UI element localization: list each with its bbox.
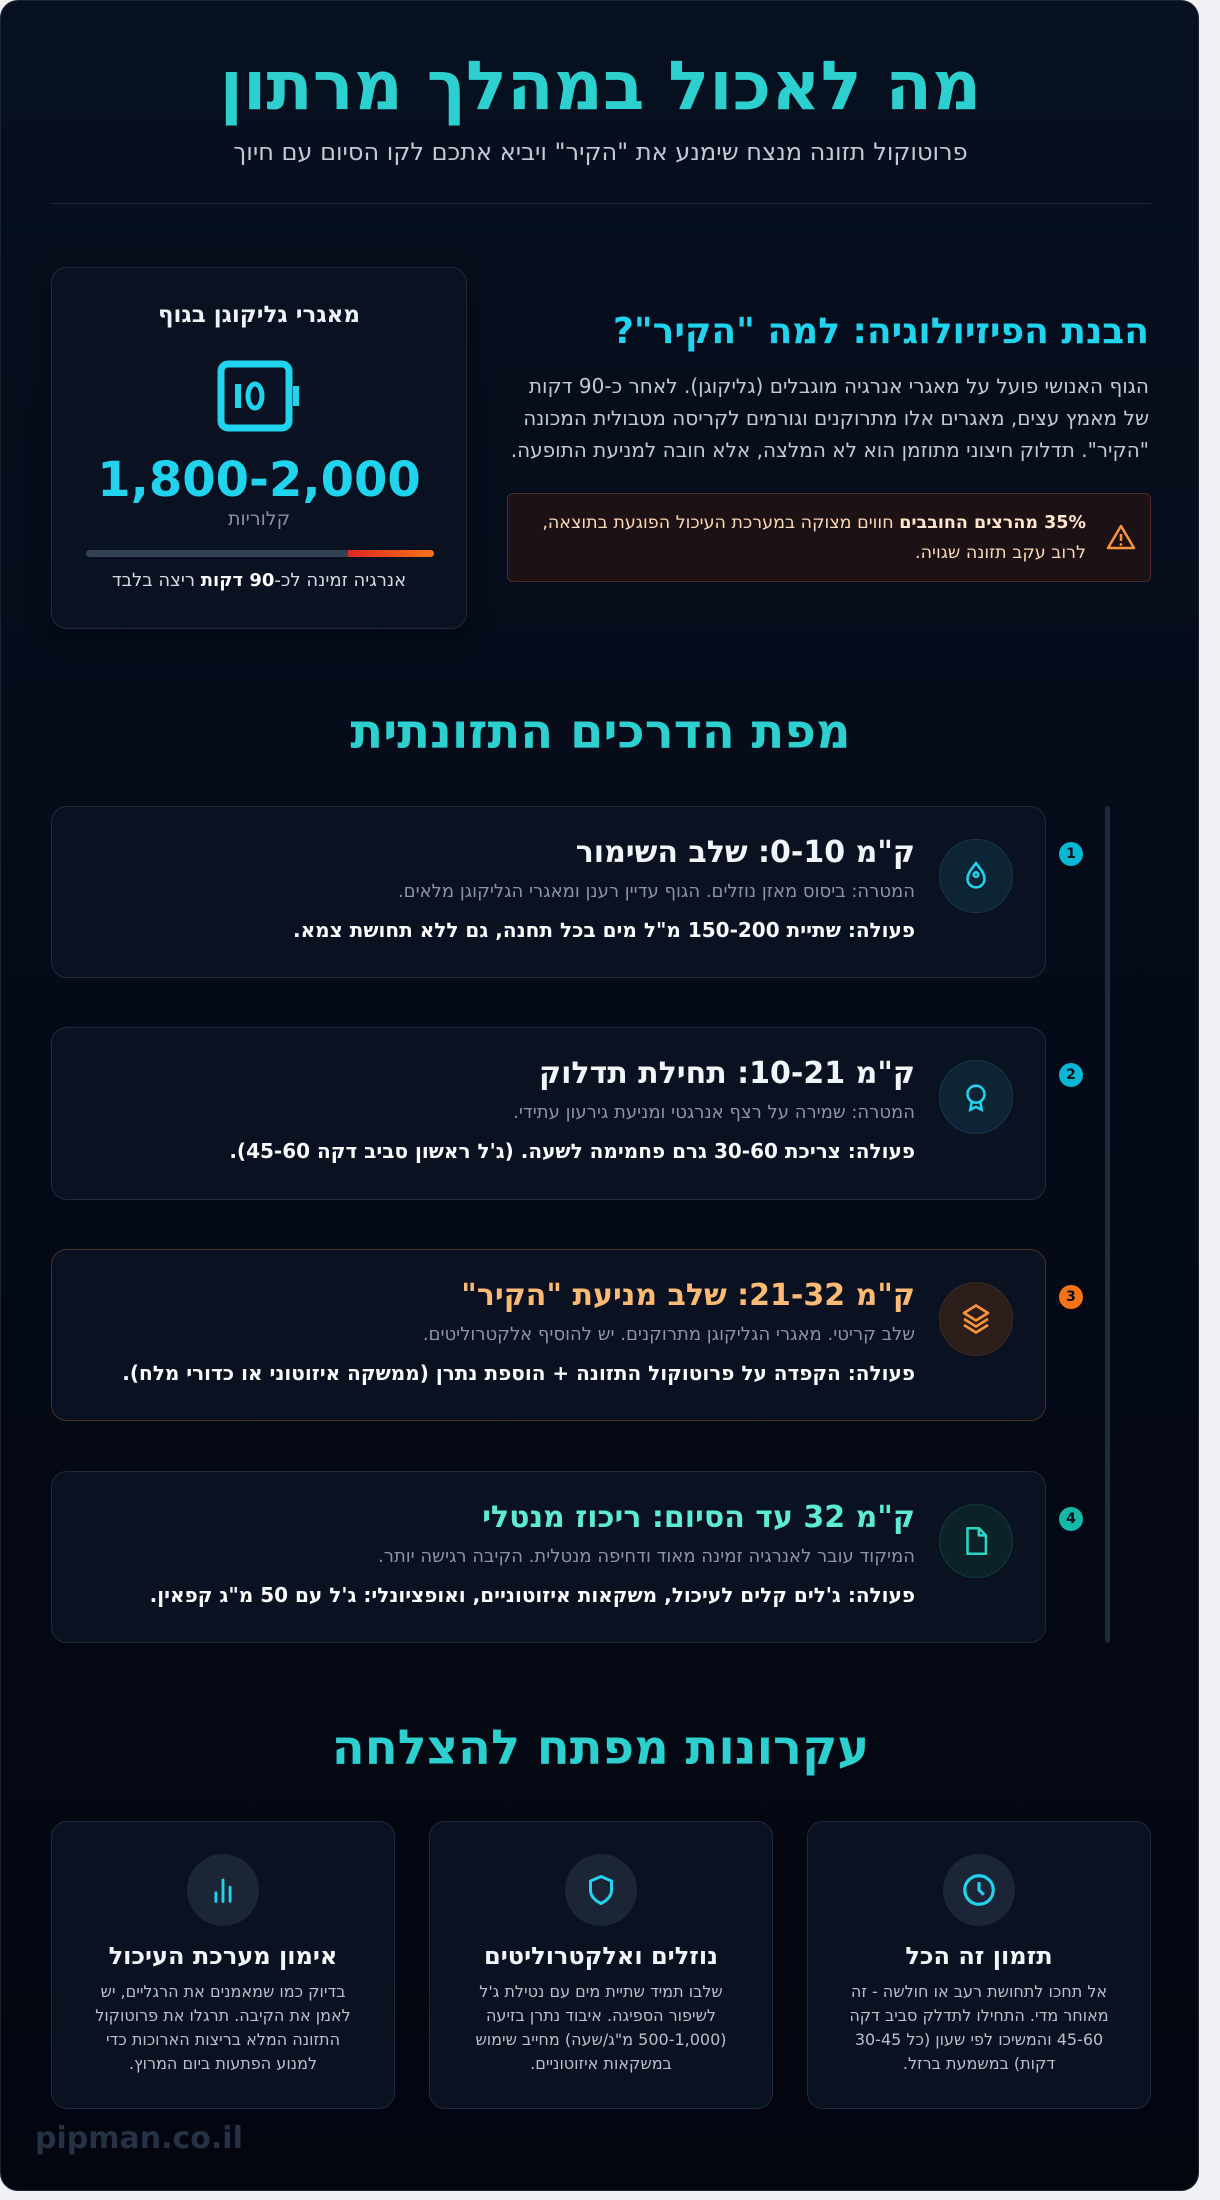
icon: medal xyxy=(939,1060,1013,1134)
stage 1 title: ק"מ 0-10: שלב השימור xyxy=(576,835,915,870)
heading: nutrition map: מפת הדרכים התזונתית xyxy=(350,704,851,760)
badge 4: 4 xyxy=(1066,1511,1076,1527)
gut text: בדיוק כמו שמאמנים את הרגליים, יש לאמן את הקיבה. תרגלו את פרוטוקול התזונה המלא בריצות הארוכות כדי למנוע הפתעות ביום המרוץ. xyxy=(95,1982,351,2073)
icon: warning xyxy=(1106,524,1136,550)
panel: stage 4 xyxy=(51,1471,1046,1643)
panel: timing xyxy=(807,1821,1151,2109)
panel: stage 1 xyxy=(51,806,1046,978)
badge 4 xyxy=(1059,1507,1083,1531)
panel: stage 3 xyxy=(51,1249,1046,1421)
stage 2 goal: המטרה: שמירה על רצף אנרגטי ומניעת גירעון עתידי. xyxy=(513,1102,915,1123)
icon: drop xyxy=(939,839,1013,913)
text block: physiology: הגוף האנושי פועל על מאגרי אנרגיה מוגבלים (גליקוגן). לאחר כ-90 דקות של מאמץ עצים, מאגרים אלו מתרוקנים וגורמים לקריסה מטבולית המכונה "הקיר". תדלוק חיצוני מתוזמן הוא לא המלצה, אלא חובה למניעת התופעה. xyxy=(511,374,1149,462)
gut title: אימון מערכת העיכול xyxy=(109,1942,337,1970)
badge 1: 1 xyxy=(1066,846,1076,862)
panel: stage 2 xyxy=(51,1027,1046,1200)
panel: gut training xyxy=(51,1821,395,2109)
heading: physiology: הבנת הפיזיולוגיה: למה "הקיר"? xyxy=(613,311,1149,352)
badge 3: 3 xyxy=(1066,1289,1076,1305)
number: calories: 1,800-2,000 xyxy=(97,452,421,508)
caption: אנרגיה זמינה לכ-90 דקות ריצה בלבד xyxy=(112,570,406,591)
stage 3 action: פעולה: הקפדה על פרוטוקול התזונה + הוספת נתרן (ממשקה איזוטוני או כדורי מלח). xyxy=(122,1361,915,1385)
stage 4 action: פעולה: ג'לים קלים לעיכול, משקאות איזוטוניים, ואופציונלי: ג'ל עם 50 מ"ג קפאין. xyxy=(150,1583,915,1607)
stage 2 action: פעולה: צריכת 30-60 גרם פחמימה לשעה. (ג'ל ראשון סביב דקה 45-60). xyxy=(229,1139,915,1163)
icon: file xyxy=(939,1504,1013,1578)
badge 2 xyxy=(1059,1063,1083,1087)
stage 4 title: ק"מ 32 עד הסיום: ריכוז מנטלי xyxy=(482,1500,915,1535)
energy bar xyxy=(86,550,434,557)
icon: bars xyxy=(187,1854,259,1926)
stage 2 title: ק"מ 10-21: תחילת תדלוק xyxy=(539,1056,915,1091)
watermark: pipman.co.il xyxy=(35,2121,243,2156)
timing title: תזמון זה הכל xyxy=(905,1942,1053,1970)
calories label: קלוריות xyxy=(228,508,290,530)
timeline line xyxy=(1105,806,1110,1643)
title: מה לאכול במהלך מרתון xyxy=(220,47,981,126)
badge 2: 2 xyxy=(1066,1067,1076,1083)
icon: layers xyxy=(939,1282,1013,1356)
badge 1 xyxy=(1059,842,1083,866)
warning text: 35% מהרצים החובבים חווים מצוקה במערכת העיכול הפוגעת בתוצאה, לרוב עקב תזונה שגויה. xyxy=(542,513,1086,563)
stage 4 goal: המיקוד עובר לאנרגיה זמינה מאוד ודחיפה מנטלית. הקיבה רגישה יותר. xyxy=(378,1546,915,1567)
stage 3 title: ק"מ 21-32: שלב מניעת "הקיר" xyxy=(461,1278,915,1313)
callout: warning xyxy=(507,493,1151,582)
timing text: אל תחכו לתחושת רעב או חולשה - זה מאוחר מדי. התחילו לתדלק סביב דקה 45-60 והמשיכו לפי שעון (כל 30-45 דקות) במשמעת ברזל. xyxy=(849,1982,1109,2073)
fluids text: שלבו תמיד שתיית מים עם נטילת ג'ל לשיפור הספיגה. איבוד נתרן בזיעה (500-1,000 מ"ג/שעה) מחייב שימוש במשקאות איזוטוניים. xyxy=(475,1982,727,2073)
stage 3 goal: שלב קריטי. מאגרי הגליקוגן מתרוקנים. יש להוסיף אלקטרוליטים. xyxy=(423,1324,915,1345)
icon: shield xyxy=(565,1854,637,1926)
stage 1 action: פעולה: שתיית 150-200 מ"ל מים בכל תחנה, גם ללא תחושת צמא. xyxy=(293,918,915,942)
icon: battery xyxy=(218,360,299,432)
panel: glycogen stores xyxy=(51,267,467,629)
icon: clock xyxy=(943,1854,1015,1926)
heading: key principles: עקרונות מפתח להצלחה xyxy=(332,1720,869,1776)
stage 1 goal: המטרה: ביסוס מאזן נוזלים. הגוף עדיין רענן ומאגרי הגליקוגן מלאים. xyxy=(398,881,915,902)
glycogen heading: מאגרי גליקוגן בגוף xyxy=(158,302,360,328)
panel: fluids xyxy=(429,1821,773,2109)
subtitle: פרוטוקול תזונה מנצח שימנע את "הקיר" ויביא אתכם לקו הסיום עם חיוך xyxy=(233,138,968,166)
fluids title: נוזלים ואלקטרוליטים xyxy=(484,1942,718,1970)
badge 3 xyxy=(1059,1285,1083,1309)
